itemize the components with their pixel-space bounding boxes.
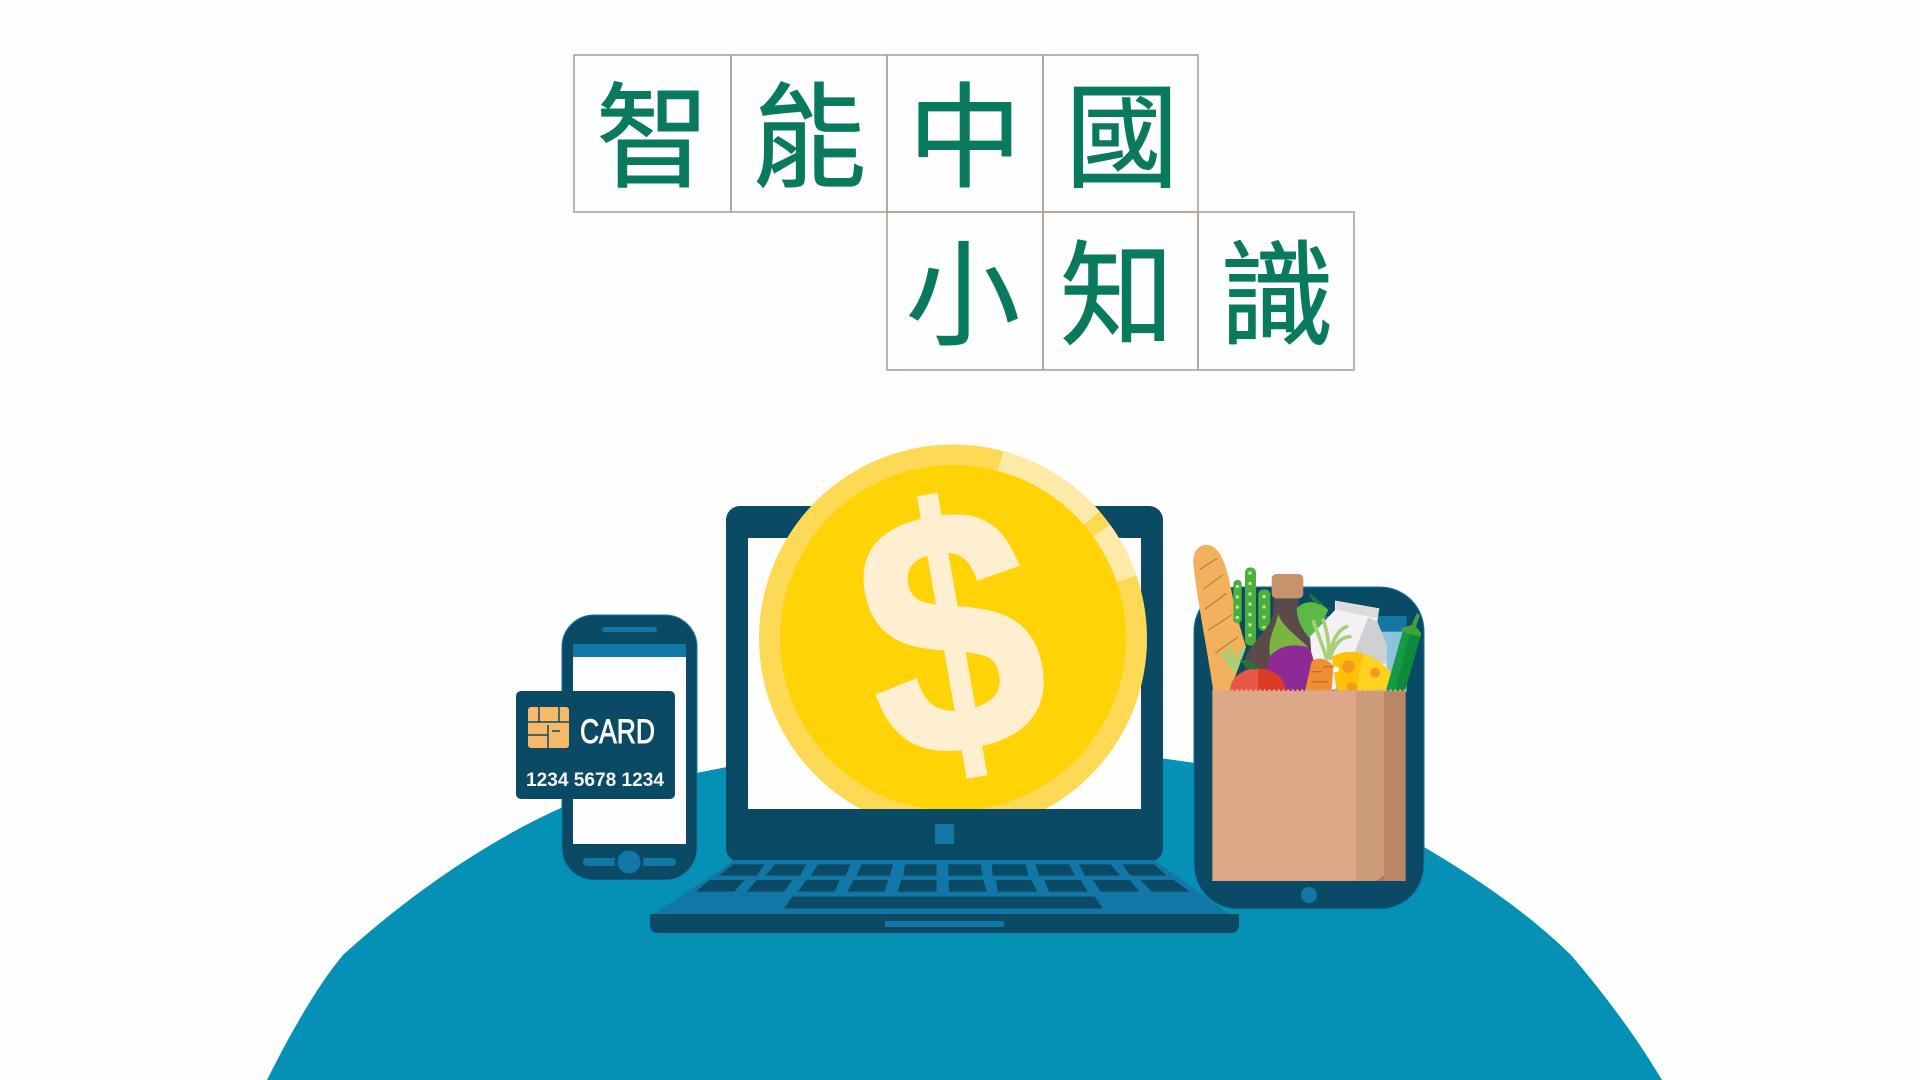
title second row: 識 [1220,204,1334,369]
coin rim highlight [1000,461,1126,579]
eggplant [1267,613,1314,691]
title second row: 小 [906,204,1020,369]
phone screen [573,644,686,844]
laptop keyboard deck [654,860,1229,914]
celery [1313,620,1350,658]
groceries [1193,545,1421,881]
title grid [574,55,1354,370]
baguette [1193,545,1246,691]
dollar sign: $ [832,427,1069,837]
carrot [1305,659,1333,691]
chip base [528,707,569,748]
coin face [780,465,1126,811]
title first row: 國 [1065,46,1179,211]
sprout [1222,647,1243,670]
milk carton [1310,601,1387,691]
icon: credit card [516,691,675,799]
keys [696,864,1190,908]
card body [516,691,675,799]
deck surface [654,860,1229,914]
icon: gold coin with dollar sign [759,444,1147,809]
phone home button [616,849,642,875]
green vegetables [1233,567,1270,646]
phone home bar [583,858,676,866]
icon: laptop [650,506,1239,933]
title first row: 能 [752,46,866,211]
laptop screen [748,538,1141,809]
title second row: 知 [1060,204,1174,369]
icon: tablet with grocery bag [1193,545,1424,909]
bottle [1245,574,1316,691]
coin body [759,444,1147,832]
tablet body [1194,587,1424,909]
tablet screen reflection [1380,632,1407,692]
phone speaker [602,627,657,632]
phone status bar [573,644,686,657]
green apple [1297,593,1328,640]
coin rim [759,444,1147,832]
title first row: 中 [908,46,1022,211]
icon: smartphone [562,615,697,880]
paper bag [1212,690,1406,881]
title first row [596,46,1179,211]
tablet button [1301,887,1317,903]
phone body [562,615,697,880]
cheese [1332,652,1394,692]
card chip [528,707,569,748]
title first row: 智 [596,46,710,211]
laptop base [650,914,1239,933]
laptop lid [726,506,1163,862]
card number: 1234 5678 1234 [526,770,664,791]
chip lines [528,707,569,748]
cucumber [1386,613,1421,691]
title second row [906,204,1334,369]
trackpad [885,921,1004,927]
blue hill background [267,745,1662,1080]
tomato [1230,660,1286,691]
laptop logo [935,824,954,844]
title: 智能中國小知識 [574,46,1354,370]
tablet screen top [1297,616,1407,693]
card label: CARD [580,713,655,751]
